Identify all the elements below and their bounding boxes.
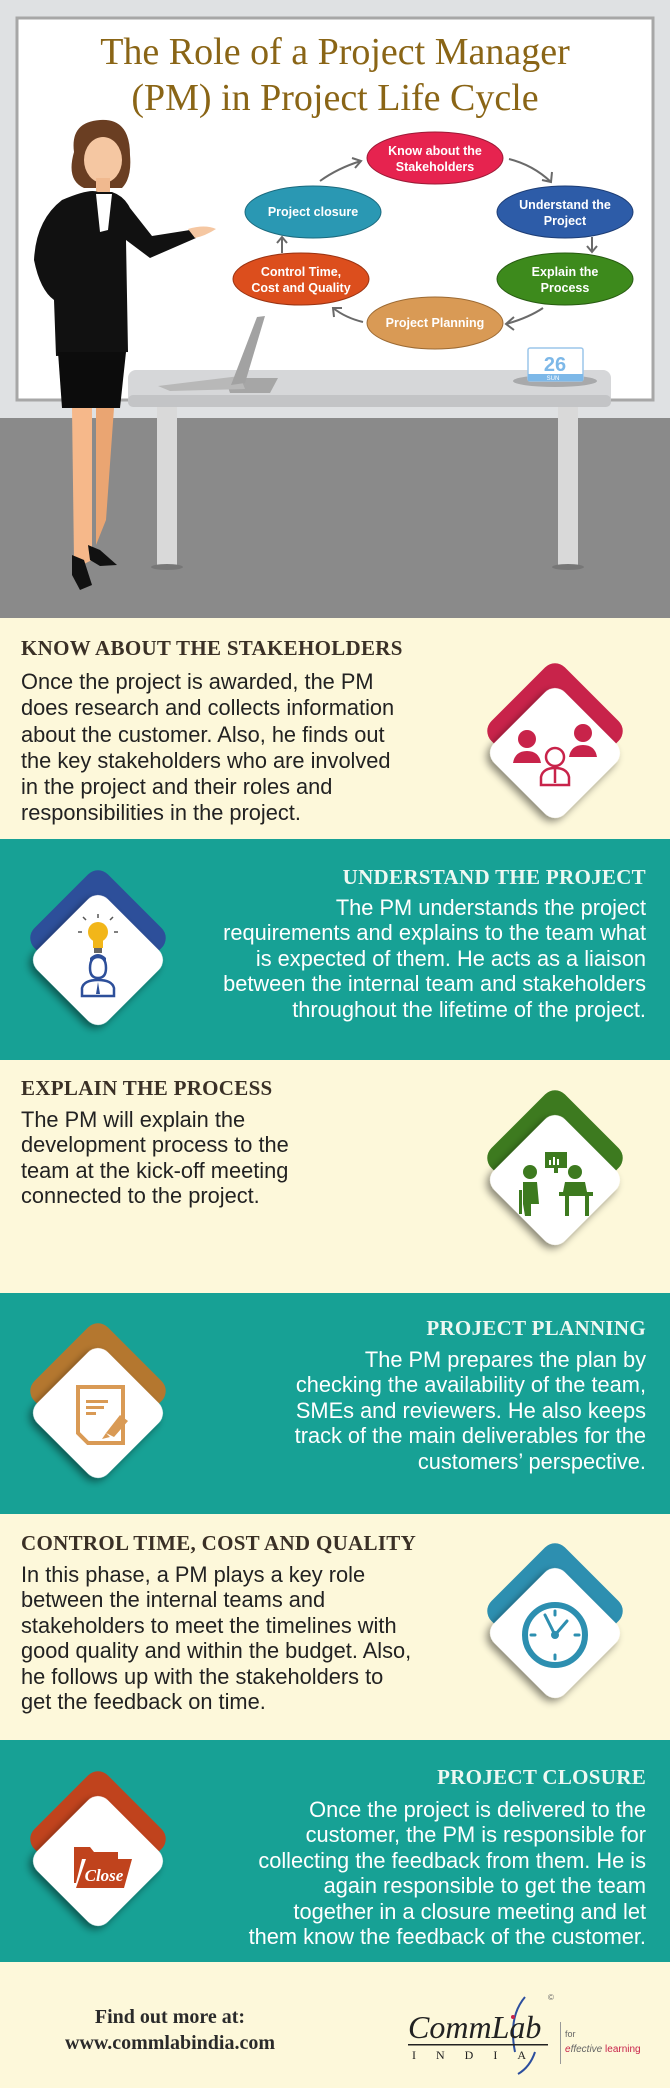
text: find out more: Find out more at: — [95, 2006, 245, 2028]
text: understand: between the internal team and stakeholders — [223, 971, 646, 996]
text: closure: collecting the feedback from them. He is — [258, 1848, 646, 1873]
icon: document — [26, 1323, 166, 1486]
text: stakeholders: in the project and their roles and — [21, 774, 332, 799]
text: closure: Once the project is delivered to the — [309, 1797, 646, 1822]
text: explain: team at the kick-off meeting — [21, 1158, 288, 1183]
ellipse: control time cost quality: Cost and Quality — [251, 281, 351, 295]
panel: control time cost and quality — [0, 1514, 670, 1740]
ellipse: control time cost quality — [233, 253, 369, 305]
text: explain: development process to the — [21, 1132, 289, 1157]
icon: stakeholders people — [482, 663, 623, 826]
heading: control time cost quality: CONTROL TIME, COST AND QUALITY — [21, 1531, 416, 1555]
text: find out more: www.commlabindia.com — [65, 2032, 275, 2054]
text: planning — [294, 1347, 646, 1474]
calendar: SUN — [547, 376, 559, 382]
text: planning: customers’ perspective. — [418, 1449, 646, 1474]
text: control: stakeholders to meet the timelines with — [21, 1613, 397, 1638]
heading: know about the stakeholders: KNOW ABOUT THE STAKEHOLDERS — [21, 636, 403, 660]
text: stakeholders: the key stakeholders who are involved — [21, 748, 391, 773]
ellipse: explain the process — [497, 253, 633, 305]
heading: understand the project: UNDERSTAND THE PROJECT — [343, 865, 646, 889]
ellipse: project closure — [245, 186, 381, 238]
woman — [34, 120, 216, 590]
text: control — [21, 1562, 411, 1714]
text: stakeholders: about the customer. Also, he finds out — [21, 722, 385, 747]
text: planning: SMEs and reviewers. He also keeps — [296, 1398, 646, 1423]
text: explain: The PM will explain the — [21, 1107, 245, 1132]
laptop — [158, 316, 278, 393]
ellipse: understand the project: Understand the — [519, 198, 611, 212]
icon: bulb and person — [26, 870, 166, 1032]
cycle diagram — [233, 132, 633, 349]
heading: project planning: PROJECT PLANNING — [426, 1316, 646, 1340]
logo: commlab india: for — [565, 2029, 576, 2039]
icon: meeting — [482, 1090, 623, 1254]
ellipse: know about the stakeholders: Know about the — [388, 144, 482, 158]
ellipse: understand the project — [497, 186, 633, 238]
ellipse: understand the project: Project — [544, 214, 587, 228]
heading: project closure: PROJECT CLOSURE — [437, 1765, 646, 1789]
text: explain — [21, 1107, 289, 1208]
ellipse: explain the process: Process — [541, 281, 589, 295]
logo: commlab india: effective learning — [565, 2044, 641, 2055]
panel: project planning — [0, 1293, 670, 1514]
whiteboard — [17, 18, 653, 400]
icon: close folder — [26, 1771, 166, 1934]
text: closure — [248, 1797, 646, 1949]
title — [100, 31, 570, 119]
text: understand: The PM understands the project — [336, 895, 646, 920]
header scene — [0, 0, 670, 618]
text: understand — [223, 895, 646, 1022]
arrows — [277, 158, 597, 330]
text: understand: requirements and explains to the team what — [223, 920, 646, 945]
calendar: 26 — [544, 354, 566, 376]
icon: clock — [482, 1543, 623, 1706]
text: control: between the internal teams and — [21, 1587, 325, 1612]
ellipse: project planning: Project Planning — [386, 316, 484, 330]
heading: explain the process: EXPLAIN THE PROCESS — [21, 1076, 273, 1100]
text: understand: is expected of them. He acts as a liaison — [256, 946, 646, 971]
text: planning: The PM prepares the plan by — [365, 1347, 646, 1372]
ellipse: project planning — [367, 297, 503, 349]
ellipse: know about the stakeholders — [367, 132, 503, 184]
ellipse: explain the process: Explain the — [532, 265, 598, 279]
panel: know about the stakeholders — [0, 618, 670, 839]
text: closure: again responsible to get the team — [324, 1873, 646, 1898]
logo: commlab india: INDIA — [412, 2048, 546, 2062]
text: find out more — [65, 2006, 275, 2054]
text: control: get the feedback on time. — [21, 1689, 266, 1714]
text: closure: them know the feedback of the customer. — [249, 1924, 646, 1949]
footer — [0, 1962, 670, 2088]
logo: commlab india — [408, 1993, 641, 2075]
calendar — [513, 348, 597, 387]
logo: commlab india: CommLab — [408, 2009, 541, 2045]
text: closure: customer, the PM is responsible for — [306, 1822, 646, 1847]
text: explain: connected to the project. — [21, 1183, 260, 1208]
panel: project closure — [0, 1740, 670, 1962]
panel: understand the project — [0, 839, 670, 1060]
text: planning: checking the availability of the team, — [296, 1372, 646, 1397]
text: planning: track of the main deliverables for the — [295, 1423, 646, 1448]
text: stakeholders — [21, 669, 394, 825]
text: closure: together in a closure meeting and let — [293, 1899, 646, 1924]
text: stakeholders: Once the project is awarded, the PM — [21, 669, 374, 694]
text: understand: throughout the lifetime of the project. — [292, 997, 646, 1022]
title: (PM) in Project Life Cycle — [131, 77, 539, 119]
title: The Role of a Project Manager — [100, 31, 570, 73]
logo: commlab india: © — [548, 1993, 554, 2002]
icon: close folder: Close — [85, 1866, 124, 1885]
text: stakeholders: responsibilities in the project. — [21, 800, 301, 825]
text: control: good quality and within the budget. Also, — [21, 1638, 411, 1663]
text: control: he follows up with the stakeholders to — [21, 1664, 383, 1689]
text: stakeholders: does research and collects information — [21, 695, 394, 720]
text: control: In this phase, a PM plays a key role — [21, 1562, 365, 1587]
ellipse: control time cost quality: Control Time, — [261, 265, 341, 279]
panel: explain the process — [0, 1060, 670, 1293]
ellipse: project closure: Project closure — [268, 205, 358, 219]
table — [128, 370, 611, 570]
ellipse: know about the stakeholders: Stakeholders — [396, 160, 474, 174]
